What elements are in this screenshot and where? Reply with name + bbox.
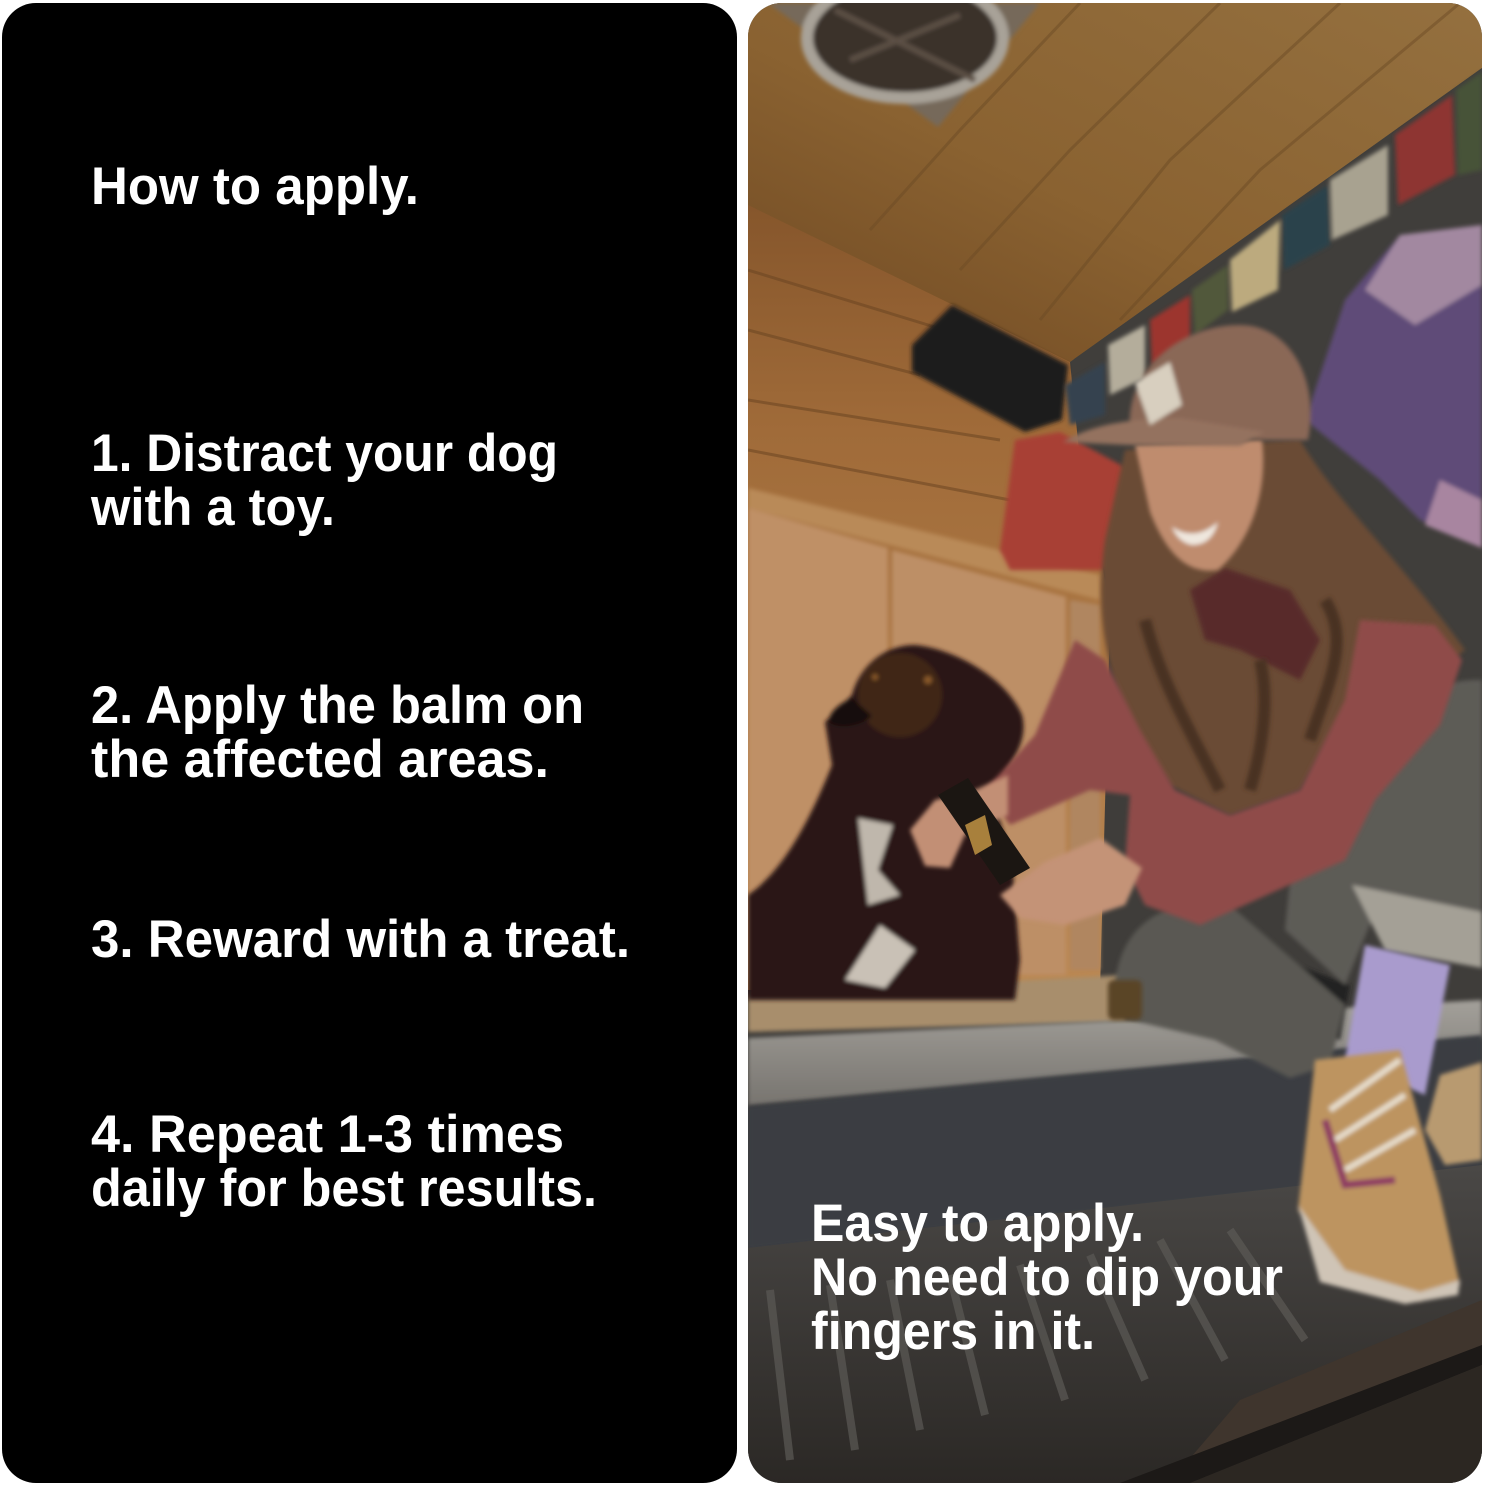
- speaker box: [912, 305, 1068, 432]
- step 1: 1. Distract your dog: [91, 424, 558, 483]
- hanging purple jacket: [1305, 225, 1482, 548]
- step 2: [91, 676, 584, 789]
- red jacket on hook: [1000, 432, 1130, 570]
- step 4: daily for best results.: [91, 1159, 597, 1218]
- van wall wood: [748, 130, 1110, 990]
- step 4: [91, 1105, 597, 1218]
- balm tube: [938, 778, 1030, 885]
- prayer flags: [1065, 72, 1482, 425]
- panel: instructions: [2, 3, 737, 1483]
- lower step tread: [748, 1165, 1482, 1483]
- tread ribs: [770, 1230, 1305, 1460]
- van step ledge: [748, 1000, 1482, 1106]
- woman hair: [1101, 440, 1465, 815]
- woman hands holding balm: [910, 775, 1142, 925]
- step 4: 4. Repeat 1-3 times: [91, 1105, 564, 1164]
- wall planks: [748, 270, 1010, 500]
- wooden ceiling: [748, 3, 1482, 362]
- woman face: [1135, 440, 1263, 571]
- cap: [1063, 325, 1311, 446]
- roof vent: [768, 0, 1040, 127]
- step 3: 3. Reward with a treat.: [91, 910, 630, 969]
- photo caption: fingers in it.: [811, 1302, 1095, 1361]
- grey side wall: [1070, 68, 1482, 450]
- second balm tube on step: [1108, 980, 1142, 1020]
- photo caption: No need to dip your: [811, 1248, 1283, 1307]
- panel: photo of woman applying balm to dog in a van: [748, 0, 1482, 1483]
- woman jacket: [985, 568, 1462, 925]
- step 1: [90, 424, 558, 537]
- woman shoes: [1298, 1050, 1482, 1304]
- photo caption: [811, 1194, 1283, 1361]
- photo caption: Easy to apply.: [811, 1194, 1144, 1253]
- cabinet shelf and doors: [748, 488, 1100, 980]
- dirt and rail at bottom right: [1120, 1300, 1482, 1483]
- woman jeans: [1115, 680, 1482, 1078]
- woman sock: [1345, 945, 1450, 1095]
- step 2: 2. Apply the balm on: [91, 676, 584, 735]
- step 1: with a toy.: [90, 478, 335, 537]
- step 2: the affected areas.: [91, 730, 549, 789]
- step carpet: [748, 1035, 1482, 1250]
- floor mat: [748, 975, 1125, 1032]
- heading: How to apply.: [91, 157, 419, 216]
- ceiling planks: [870, 3, 1460, 320]
- dog: [748, 645, 1024, 1000]
- hair strands: [1145, 600, 1337, 790]
